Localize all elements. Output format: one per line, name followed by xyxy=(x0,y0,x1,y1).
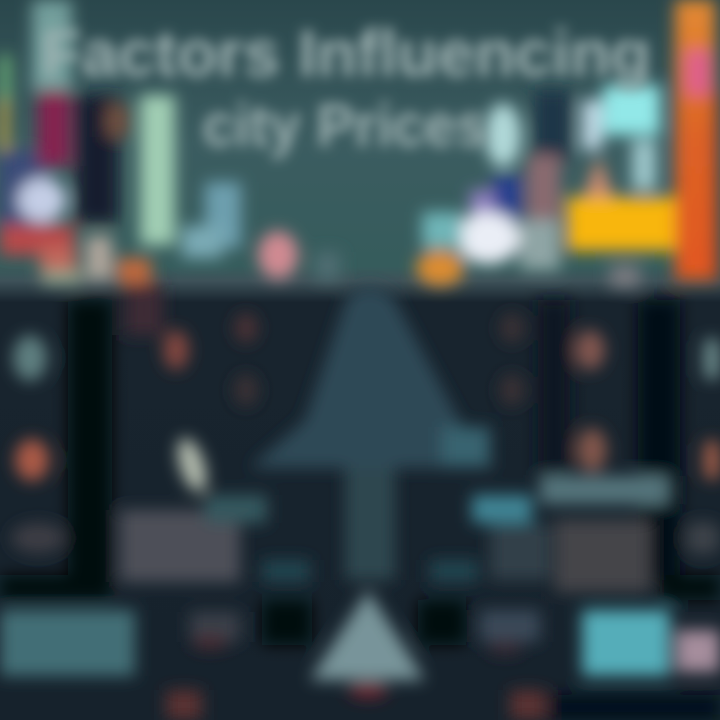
title line 1: Factors Influencing xyxy=(41,16,651,90)
panel: right skyline xyxy=(416,0,720,287)
icon: bottom triangle xyxy=(262,590,466,698)
title xyxy=(41,16,651,159)
panel: lower left building xyxy=(0,285,310,720)
panel: left skyline xyxy=(0,0,340,284)
title line 2: city Prices xyxy=(202,92,488,159)
panel: lower right building xyxy=(430,300,720,720)
panel: lower center road xyxy=(250,285,495,580)
